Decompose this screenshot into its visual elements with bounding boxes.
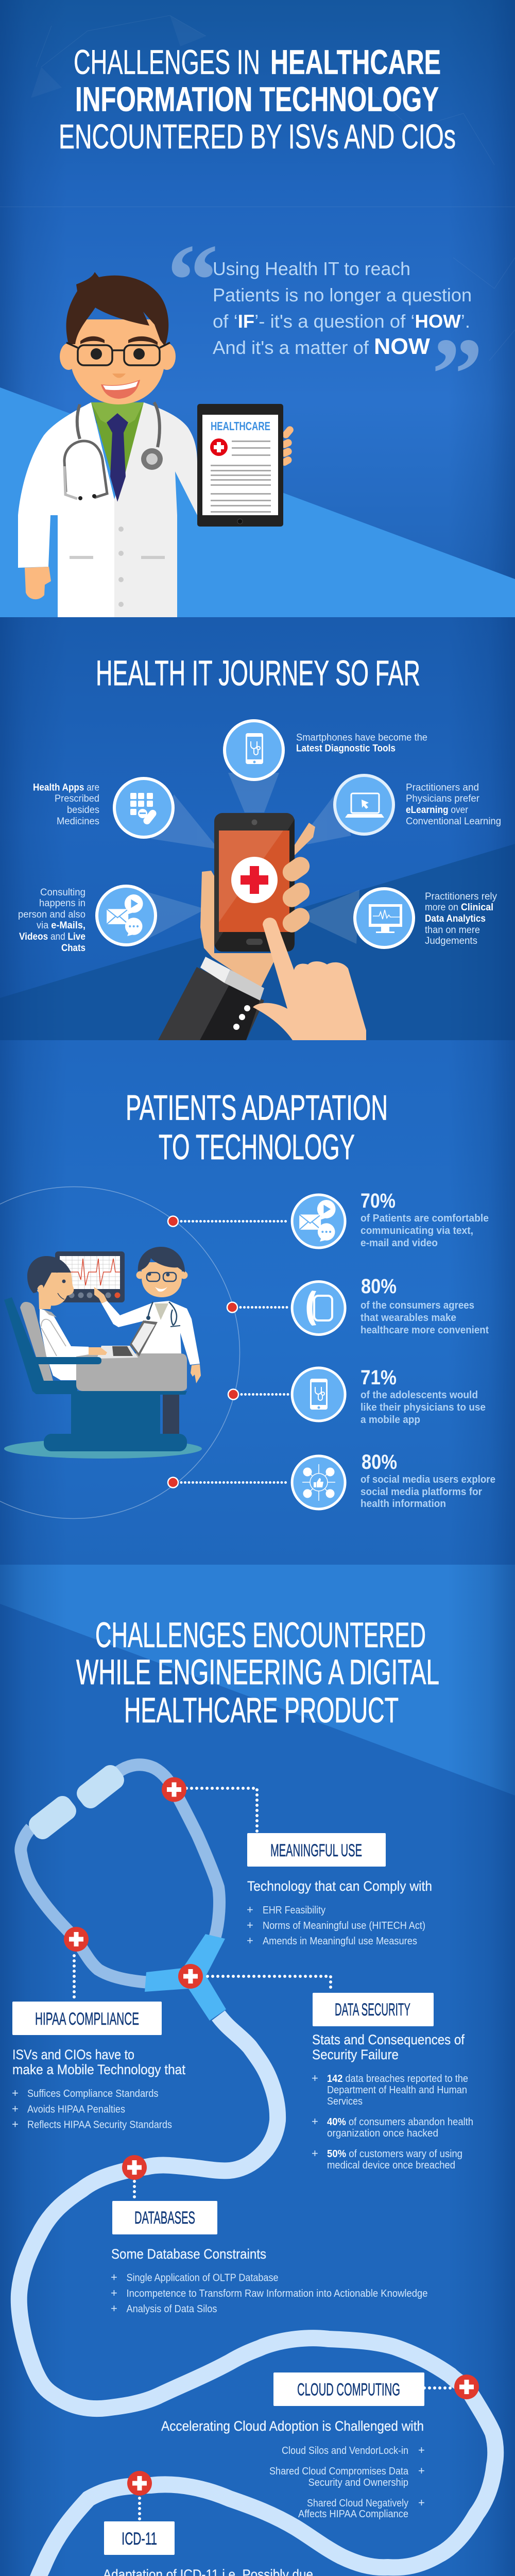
block: data security: Security Failure bbox=[312, 2047, 399, 2062]
block: cloud computing: CLOUD COMPUTING bbox=[297, 2380, 400, 2400]
stat: 71% bbox=[228, 1366, 486, 1426]
item: consulting: via e-Mails, bbox=[37, 920, 85, 931]
block: data security: organization once hacked bbox=[327, 2128, 438, 2139]
panel: hero bbox=[0, 43, 515, 617]
heading bbox=[126, 1088, 388, 1167]
block: databases: Some Database Constraints bbox=[111, 2246, 266, 2262]
block: databases: Incompetence to Transform Raw Information into Actionable Knowledge bbox=[127, 2288, 427, 2299]
block: cloud computing: + bbox=[418, 2464, 425, 2477]
panel: patients adaptation bbox=[0, 1088, 495, 1519]
block: hipaa compliance: Reflects HIPAA Security Standards bbox=[27, 2120, 172, 2131]
stat: 80% social media bbox=[168, 1451, 495, 1510]
item: eLearning bbox=[335, 775, 501, 834]
block: hipaa compliance: ISVs and CIOs have to bbox=[12, 2047, 134, 2062]
block: meaningful use: EHR Feasibility bbox=[263, 1905, 325, 1916]
stat: 70%: 70% bbox=[360, 1190, 396, 1212]
block: meaningful use: Amends in Meaningful use Measures bbox=[263, 1936, 417, 1947]
quote: “ bbox=[167, 224, 218, 337]
item: data analytics bbox=[355, 889, 497, 947]
orbit circle bbox=[0, 1187, 240, 1519]
stat: 70% bbox=[168, 1190, 489, 1249]
item: health apps: Medicines bbox=[57, 816, 99, 827]
block: data security: medical device once breached bbox=[327, 2160, 455, 2171]
block: hipaa compliance: Suffices Compliance Standards bbox=[27, 2088, 159, 2099]
stat: 80% wearables: of the consumers agrees bbox=[360, 1300, 474, 1311]
block: meaningful use: Norms of Meaningful use (HITECH Act) bbox=[263, 1920, 425, 1931]
item: diagnostic tools: Latest Diagnostic Tools bbox=[296, 743, 396, 754]
light blue diagonal backdrop bbox=[0, 387, 515, 617]
tablet: HEALTHCARE bbox=[211, 419, 270, 433]
stat: 70%: e-mail and video bbox=[360, 1238, 438, 1249]
stat: 71%: 71% bbox=[360, 1366, 397, 1389]
quote: ” bbox=[432, 317, 483, 431]
stethoscope tube bbox=[19, 1761, 495, 2576]
block: data security: DATA SECURITY bbox=[335, 2000, 410, 2020]
block: cloud computing: Affects HIPAA Compliance bbox=[298, 2509, 408, 2520]
item: health apps: Health Apps are bbox=[33, 782, 99, 793]
stat: 80% social media: health information bbox=[360, 1498, 446, 1510]
title: CHALLENGES IN bbox=[74, 43, 260, 81]
item: data analytics: more on Clinical bbox=[425, 902, 493, 913]
stat: 80% social media: of social media users explore bbox=[360, 1474, 495, 1485]
item: consulting: Videos and Live bbox=[19, 931, 85, 942]
block: hipaa compliance: make a Mobile Technology that bbox=[12, 2062, 185, 2077]
stat: 80% wearables: healthcare more convenient bbox=[360, 1325, 489, 1336]
block: cloud computing bbox=[161, 2372, 425, 2520]
stat: 80% wearables bbox=[227, 1275, 489, 1336]
block: icd-11: ICD-11 bbox=[122, 2529, 157, 2549]
item: diagnostic tools: Smartphones have become the bbox=[296, 733, 427, 743]
light rays bbox=[138, 773, 359, 944]
block: meaningful use: + bbox=[247, 1919, 253, 1931]
stat: 71%: of the adolescents would bbox=[360, 1389, 478, 1401]
item: health apps: Prescribed bbox=[55, 793, 99, 804]
tablet bbox=[197, 404, 283, 527]
block: meaningful use: MEANINGFUL USE bbox=[270, 1841, 362, 1860]
quote: Patients is no longer a question bbox=[213, 284, 472, 306]
block: hipaa compliance bbox=[12, 2002, 185, 2131]
title: HEALTHCARE bbox=[270, 43, 441, 81]
item: health apps: besides bbox=[67, 805, 99, 816]
block: databases bbox=[111, 2201, 427, 2315]
block: data security: 142 data breaches reported to the bbox=[327, 2073, 468, 2084]
stat: 71%: like their physicians to use bbox=[360, 1402, 486, 1413]
fingers and pointing hand bbox=[253, 823, 366, 1040]
hand holding phone bbox=[158, 871, 278, 1040]
panel: engineering challenges bbox=[12, 1615, 495, 2576]
block: data security: Services bbox=[327, 2096, 363, 2107]
item: eLearning: eLearning over bbox=[406, 805, 469, 816]
block: data security: + bbox=[312, 2115, 318, 2128]
block: data security: + bbox=[312, 2147, 318, 2160]
block: databases: Single Application of OLTP Database bbox=[127, 2272, 278, 2283]
block: data security: 50% of customers wary of using bbox=[327, 2148, 462, 2160]
block: hipaa compliance: Avoids HIPAA Penalties bbox=[27, 2104, 125, 2115]
item: consulting bbox=[18, 886, 156, 954]
block: databases: + bbox=[111, 2271, 117, 2283]
block: cloud computing: Accelerating Cloud Adoption is Challenged with bbox=[161, 2418, 424, 2434]
block: hipaa compliance: + bbox=[12, 2087, 19, 2099]
block: cloud computing: Shared Cloud Negatively bbox=[307, 2498, 408, 2509]
quote bbox=[167, 224, 483, 431]
block: databases: Analysis of Data Silos bbox=[127, 2303, 217, 2315]
item: health apps bbox=[33, 778, 173, 837]
block: databases: + bbox=[111, 2286, 117, 2299]
block: data security: + bbox=[312, 2072, 318, 2084]
block: cloud computing: + bbox=[418, 2496, 425, 2509]
item: eLearning: Physicians prefer bbox=[406, 793, 480, 804]
item: diagnostic tools bbox=[225, 721, 427, 779]
heading: PATIENTS ADAPTATION bbox=[126, 1088, 388, 1127]
item: data analytics: than on mere bbox=[425, 925, 480, 936]
block: meaningful use: + bbox=[247, 1903, 253, 1916]
heading bbox=[76, 1615, 439, 1730]
stat: 80% wearables: 80% bbox=[361, 1275, 397, 1298]
block: cloud computing: Security and Ownership bbox=[308, 2477, 408, 2488]
connector lines bbox=[47, 1788, 453, 2576]
block: databases: DATABASES bbox=[134, 2208, 195, 2228]
markers bbox=[20, 1777, 479, 2576]
item: consulting: happens in bbox=[39, 898, 85, 909]
stat: 80% social media: social media platforms for bbox=[360, 1486, 482, 1498]
stat: 70%: communicating via text, bbox=[360, 1225, 473, 1236]
item: data analytics: Practitioners rely bbox=[425, 891, 497, 902]
block: data security: 40% of consumers abandon health bbox=[327, 2116, 473, 2128]
item: consulting: Chats bbox=[61, 943, 85, 954]
block: meaningful use: Technology that can Comply with bbox=[247, 1878, 432, 1894]
block: hipaa compliance: + bbox=[12, 2117, 19, 2131]
block: hipaa compliance: HIPAA COMPLIANCE bbox=[35, 2009, 139, 2029]
quote: And it's a matter of NOW bbox=[213, 334, 430, 359]
item: eLearning: Practitioners and bbox=[406, 782, 479, 793]
block: data security: Stats and Consequences of bbox=[312, 2032, 465, 2047]
stat: 70%: of Patients are comfortable bbox=[360, 1213, 489, 1224]
block: meaningful use: + bbox=[247, 1934, 253, 1947]
phone bbox=[214, 813, 295, 952]
item: consulting: Consulting bbox=[40, 887, 85, 898]
block: cloud computing: + bbox=[418, 2444, 425, 2456]
block: meaningful use bbox=[247, 1833, 432, 1947]
illustration: doctor and patient bbox=[4, 1247, 202, 1459]
item: consulting: person and also bbox=[18, 909, 85, 920]
block: databases: + bbox=[111, 2302, 117, 2315]
quote: Using Health IT to reach bbox=[213, 258, 410, 279]
panel: health IT journey bbox=[18, 653, 501, 1040]
stat: 80% wearables: that wearables make bbox=[360, 1312, 456, 1324]
block: data security: Department of Health and Human bbox=[327, 2084, 467, 2096]
stat: 80% social media: 80% bbox=[362, 1451, 397, 1473]
item: data analytics: Data Analytics bbox=[425, 913, 486, 924]
block: icd-11 bbox=[102, 2521, 343, 2576]
block: data security bbox=[312, 1993, 473, 2171]
block: cloud computing: Shared Cloud Compromises Data bbox=[269, 2466, 409, 2477]
quote: of ‘IF’- it's a question of ‘HOW’. bbox=[213, 311, 470, 332]
block: hipaa compliance: + bbox=[12, 2102, 19, 2115]
heading: TO TECHNOLOGY bbox=[159, 1127, 355, 1167]
item: data analytics: Judgements bbox=[425, 936, 477, 946]
item: eLearning: Conventional Learning bbox=[406, 816, 501, 827]
block: cloud computing: Cloud Silos and VendorLock-in bbox=[282, 2445, 408, 2456]
doctor illustration bbox=[18, 272, 295, 617]
title bbox=[59, 43, 456, 156]
stat: 71%: a mobile app bbox=[360, 1414, 420, 1426]
